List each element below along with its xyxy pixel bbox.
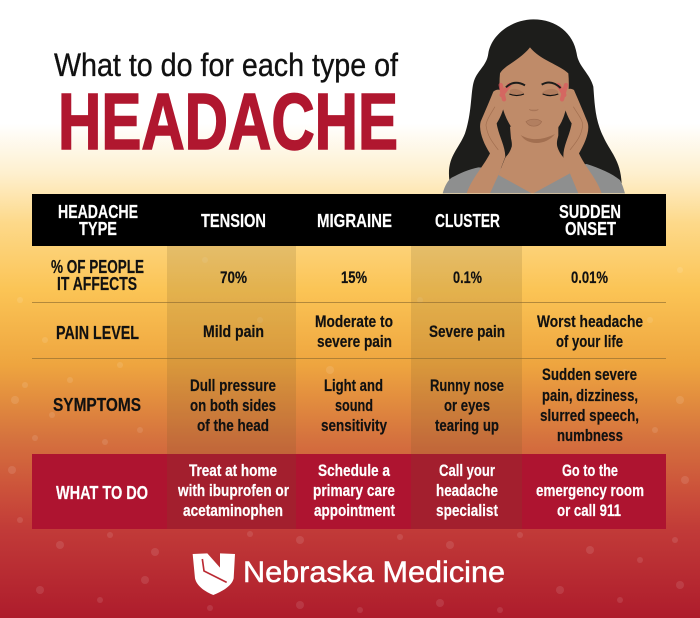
logo wordmark: Nebraska Medicine xyxy=(243,556,505,589)
row: symptoms: pain, dizziness, xyxy=(542,386,638,405)
table header row: TYPE xyxy=(79,219,117,239)
row: symptoms: sensitivity xyxy=(321,416,387,435)
row: pain level: Severe pain xyxy=(429,322,505,341)
row: percent of people affected xyxy=(51,257,608,294)
row: what to do: Treat at home xyxy=(189,461,277,480)
row: symptoms: Light and xyxy=(324,376,383,395)
row: what to do: Go to the xyxy=(562,461,618,480)
row: symptoms: SYMPTOMS xyxy=(53,395,141,415)
row: symptoms: Dull pressure xyxy=(190,376,276,395)
row: symptoms: Sudden severe xyxy=(542,365,637,384)
red row background xyxy=(32,454,666,529)
row: symptoms: tearing up xyxy=(435,416,499,435)
title line 1: What to do for each type of xyxy=(54,47,398,83)
table header row: MIGRAINE xyxy=(317,211,392,231)
table header row: SUDDEN xyxy=(559,202,621,222)
row: pain level xyxy=(56,312,643,351)
row: what to do: acetaminophen xyxy=(183,501,283,520)
table header row: ONSET xyxy=(565,219,616,239)
title line 2: HEADACHE: HEADACHE xyxy=(58,77,398,166)
row: what to do: WHAT TO DO xyxy=(56,483,148,503)
row: percent of people affected: 0.1% xyxy=(453,268,482,287)
row: what to do: Call your xyxy=(439,461,495,480)
row: percent of people affected: 15% xyxy=(341,268,367,287)
row: what to do: primary care xyxy=(313,481,395,500)
row: symptoms: Runny nose xyxy=(430,376,504,395)
row: percent of people affected: % OF PEOPLE xyxy=(51,257,144,277)
row: symptoms xyxy=(53,365,639,445)
row: pain level: severe pain xyxy=(317,332,392,351)
row: what to do: appointment xyxy=(314,501,395,520)
row: percent of people affected: 70% xyxy=(220,268,247,287)
row: symptoms: of the head xyxy=(197,416,269,435)
table header row xyxy=(32,194,666,246)
column tint: cluster xyxy=(411,246,522,529)
row: symptoms: sound xyxy=(335,396,373,415)
row: pain level: of your life xyxy=(556,332,623,351)
row: pain level: PAIN LEVEL xyxy=(56,323,139,343)
title xyxy=(54,47,398,166)
table header row: TENSION xyxy=(201,211,266,231)
table header row: HEADACHE xyxy=(58,202,138,222)
icon: shield xyxy=(193,553,235,595)
table header row: CLUSTER xyxy=(435,211,500,231)
row: what to do: headache xyxy=(436,481,498,500)
row: symptoms: or eyes xyxy=(444,396,490,415)
logo: Nebraska Medicine xyxy=(193,553,505,595)
row: pain level: Moderate to xyxy=(315,312,393,331)
column tint: tension xyxy=(167,246,296,529)
row: symptoms: on both sides xyxy=(190,396,276,415)
row: symptoms: slurred speech, xyxy=(540,406,639,425)
row: percent of people affected: IT AFFECTS xyxy=(57,274,137,294)
illustration: woman with headache xyxy=(443,19,625,193)
row: what to do: specialist xyxy=(436,501,498,520)
row: what to do: emergency room xyxy=(536,481,644,500)
row: what to do xyxy=(56,461,644,520)
row: pain level: Worst headache xyxy=(537,312,643,331)
row: what to do: with ibuprofen or xyxy=(177,481,289,500)
row: symptoms: numbness xyxy=(557,426,623,445)
row: percent of people affected: 0.01% xyxy=(571,268,608,287)
background speckles xyxy=(8,257,689,613)
row: what to do: or call 911 xyxy=(557,501,621,520)
row: what to do: Schedule a xyxy=(318,461,390,480)
row: pain level: Mild pain xyxy=(203,322,264,341)
